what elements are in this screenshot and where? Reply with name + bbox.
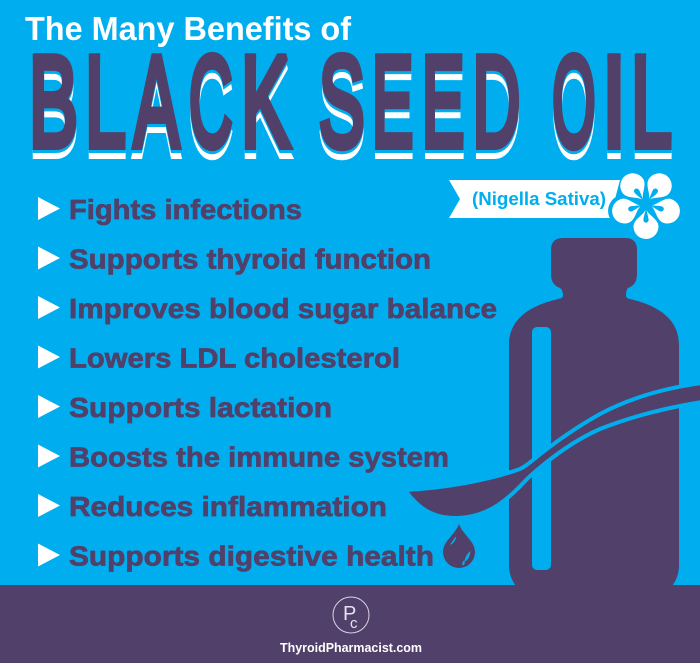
title: Black Seed Oil with layered shadow: A [134, 39, 179, 183]
bottle highlight slot [532, 327, 551, 570]
title: Black Seed Oil with layered shadow: C [189, 39, 232, 183]
title: Black Seed Oil with layered shadow: I [602, 33, 626, 177]
title: Black Seed Oil with layered shadow: E [422, 30, 464, 174]
title: Black Seed Oil with layered shadow: I [602, 30, 626, 174]
footer website text: ThyroidPharmacist.com [280, 640, 422, 655]
title: Black Seed Oil with layered shadow: E [372, 30, 413, 174]
title: Black Seed Oil with layered shadow: K [241, 30, 290, 174]
title: Black Seed Oil with layered shadow: I [602, 39, 626, 183]
benefit: immune system: Boosts the immune system [69, 442, 449, 472]
title: Black Seed Oil with layered shadow: S [319, 39, 365, 183]
title: Black Seed Oil with layered shadow: D [473, 30, 520, 174]
heading: The Many Benefits of: The Many Benefits of [25, 10, 352, 47]
title: Black Seed Oil with layered shadow: O [552, 33, 596, 177]
title: Black Seed Oil with layered shadow: C [189, 30, 232, 174]
title: Black Seed Oil with layered shadow: B [29, 33, 78, 177]
title: Black Seed Oil with layered shadow: E [422, 33, 464, 177]
logo: RC monogram [333, 597, 369, 633]
title: Black Seed Oil with layered shadow: S [319, 33, 365, 177]
logo: RC monogram: P [343, 603, 356, 625]
banner: Nigella Sativa [449, 180, 620, 218]
benefit: thyroid function: Supports thyroid function [69, 244, 431, 274]
logo: RC monogram: c [350, 615, 358, 632]
title: Black Seed Oil with layered shadow: L [85, 33, 126, 177]
icon: oil droplet [443, 524, 475, 568]
panel: benefits list [38, 194, 497, 572]
title: Black Seed Oil with layered shadow: A [134, 33, 179, 177]
title: Black Seed Oil with layered shadow: B [29, 30, 78, 174]
title: Black Seed Oil with layered shadow: K [241, 33, 290, 177]
benefit: fights infections: Fights infections [69, 194, 302, 225]
title: Black Seed Oil with layered shadow: C [189, 33, 232, 177]
icon: bottle [509, 238, 679, 586]
icon: flower [609, 168, 683, 239]
banner: Nigella Sativa: (Nigella Sativa) [472, 189, 606, 209]
title: Black Seed Oil with layered shadow: L [85, 30, 126, 174]
title: Black Seed Oil with layered shadow: O [552, 30, 596, 174]
title: Black Seed Oil with layered shadow: E [422, 39, 464, 183]
title: Black Seed Oil with layered shadow: B [29, 39, 78, 183]
title: Black Seed Oil with layered shadow: D [473, 39, 520, 183]
benefit: digestive health: Supports digestive health [69, 540, 434, 572]
benefit: blood sugar balance: Improves blood sugar balance [69, 293, 497, 324]
title: Black Seed Oil with layered shadow [29, 30, 672, 183]
footer bar [0, 585, 700, 663]
title: Black Seed Oil with layered shadow: K [241, 39, 290, 183]
benefit: LDL cholesterol: Lowers LDL cholesterol [69, 342, 400, 374]
title: Black Seed Oil with layered shadow: E [372, 33, 413, 177]
title: Black Seed Oil with layered shadow: O [552, 39, 596, 183]
title: Black Seed Oil with layered shadow: D [473, 33, 520, 177]
icon: spoon [405, 383, 700, 518]
benefit: inflammation: Reduces inflammation [69, 491, 387, 522]
title: Black Seed Oil with layered shadow: E [372, 39, 413, 183]
title: Black Seed Oil with layered shadow: L [85, 39, 126, 183]
benefit: lactation: Supports lactation [69, 392, 332, 423]
title: Black Seed Oil with layered shadow: A [134, 30, 179, 174]
title: Black Seed Oil with layered shadow: S [319, 30, 365, 174]
